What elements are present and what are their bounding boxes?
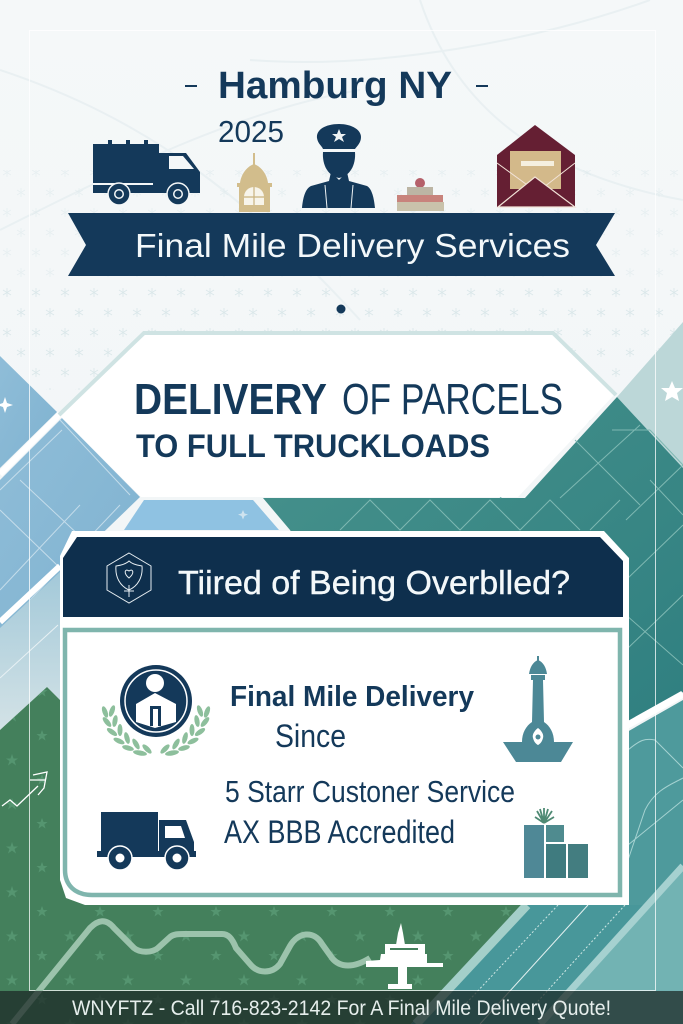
banner bbox=[68, 213, 615, 276]
icon: shield bbox=[107, 553, 151, 603]
icon: delivery truck bbox=[93, 140, 200, 205]
left arrow sketch bbox=[2, 772, 47, 806]
background: teal stripes lower right bbox=[411, 866, 683, 1024]
card body bbox=[65, 630, 620, 895]
laurel left bbox=[101, 705, 153, 757]
headline line one: DELIVERY bbox=[134, 375, 327, 424]
panel: service card bbox=[60, 531, 629, 905]
icon: seal with laurel bbox=[101, 665, 211, 757]
icon: uniformed officer bbox=[302, 124, 375, 208]
title: Hamburg NY bbox=[218, 65, 452, 107]
icon: stacked bricks bbox=[397, 178, 444, 211]
icon: tower bbox=[503, 656, 573, 762]
dot bbox=[336, 304, 346, 314]
icon: stacked boxes bbox=[524, 808, 588, 878]
feature text: since: Since bbox=[275, 718, 346, 754]
icon: tan building bbox=[237, 153, 272, 212]
laurel right bbox=[159, 705, 211, 757]
card heading: Tiired of Being Overblled? bbox=[178, 564, 570, 601]
feature text: final mile delivery: Final Mile Delivery bbox=[230, 681, 474, 713]
icon: landmark on road bbox=[366, 923, 443, 989]
card header bbox=[63, 537, 623, 617]
panel: headline hexagon bbox=[59, 333, 616, 497]
icon: delivery truck small bbox=[97, 812, 196, 870]
headline line one continued: OF PARCELS bbox=[342, 375, 563, 424]
footer text: WNYFTZ - Call 716-823-2142 For A Final Mile Delivery Quote! bbox=[72, 997, 611, 1020]
icon: envelope bbox=[497, 125, 575, 207]
headline line two: TO FULL TRUCKLOADS bbox=[136, 428, 490, 464]
feature text: customer service: 5 Starr Custoner Service bbox=[225, 774, 515, 809]
background: teal diamond right bbox=[263, 322, 683, 1024]
background: green hillside bbox=[0, 687, 527, 1024]
background: blue diamonds left bbox=[0, 356, 279, 730]
footer bar bbox=[0, 991, 683, 1024]
banner text: Final Mile Delivery Services bbox=[135, 227, 570, 264]
winding road bbox=[12, 921, 370, 1024]
feature text: accredited: AX BBB Accredited bbox=[224, 814, 455, 850]
year: 2025 bbox=[218, 114, 284, 149]
background: white diagonal stripes bbox=[0, 414, 683, 726]
